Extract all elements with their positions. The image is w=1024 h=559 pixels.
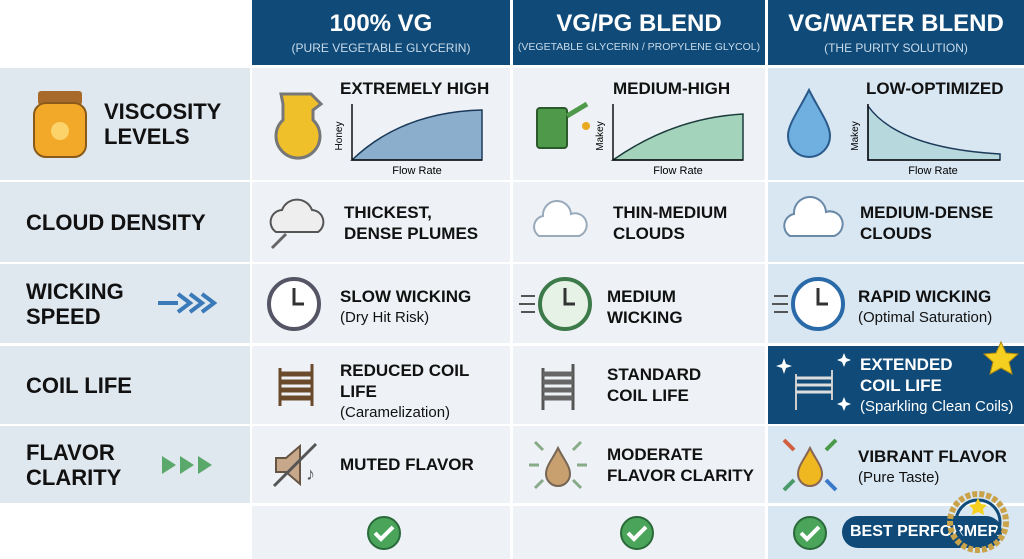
cell: VG/water cloud: CLOUDS (860, 224, 932, 243)
header: VG/water blend (768, 0, 1024, 65)
row label: viscosity (0, 68, 250, 180)
cell: VG/PG coil: COIL LIFE (607, 386, 689, 405)
header: VG/PG blend (513, 0, 765, 65)
cell: VG/water coil (highlighted): EXTENDED (860, 355, 953, 374)
cell: VG/PG flavor (513, 426, 765, 503)
cell: VG/PG viscosity: MEDIUM-HIGH (613, 79, 730, 98)
check + best performer badge: BEST PERFORMER (850, 523, 999, 540)
cell: VG flavor: MUTED FLAVOR (340, 455, 474, 474)
cell: VG coil (252, 346, 510, 424)
cell: VG/water coil (highlighted): COIL LIFE (860, 376, 942, 395)
cell: VG cloud: DENSE PLUMES (344, 224, 478, 243)
cell: VG/water flavor (768, 426, 1024, 503)
row label: coil life: COIL LIFE (26, 372, 132, 398)
cell: VG/PG viscosity (513, 68, 765, 180)
cell: VG/PG cloud: THIN-MEDIUM (613, 203, 727, 222)
cell: VG/PG flavor: MODERATE (607, 445, 703, 464)
cell: VG flavor (252, 426, 510, 503)
row label: viscosity: LEVELS (104, 124, 190, 149)
cell: VG/PG wicking: MEDIUM (607, 287, 676, 306)
header: VG/PG blend: (VEGETABLE GLYCERIN / PROPYLENE GLYCOL) (518, 41, 760, 53)
cell: VG wicking (252, 264, 510, 343)
row label: cloud density (0, 182, 250, 262)
check + best performer badge (768, 506, 1024, 559)
cell: VG wicking: (Dry Hit Risk) (340, 309, 429, 326)
cell: VG/PG coil: STANDARD (607, 365, 701, 384)
header: VG/water blend: (THE PURITY SOLUTION) (824, 41, 968, 55)
cell: VG/PG flavor: FLAVOR CLARITY (607, 466, 754, 485)
row label: coil life (0, 346, 250, 424)
cell: VG viscosity: EXTREMELY HIGH (340, 79, 489, 98)
cell: VG/water viscosity: LOW-OPTIMIZED (866, 79, 1004, 98)
bottom row: label blank (0, 506, 250, 559)
header: 100% VG: 100% VG (330, 10, 432, 37)
cell: VG/PG wicking: WICKING (607, 308, 683, 327)
cell: VG wicking: SLOW WICKING (340, 287, 471, 306)
header: 100% VG (252, 0, 510, 65)
header: VG/PG blend: VG/PG BLEND (556, 10, 722, 37)
row label: viscosity: VISCOSITY (104, 99, 221, 124)
cell: VG/water flavor: (Pure Taste) (858, 469, 939, 486)
header: VG/water blend: VG/WATER BLEND (788, 10, 1004, 37)
cell: VG/water flavor: VIBRANT FLAVOR (858, 447, 1007, 466)
row label: flavor clarity: FLAVOR (26, 440, 115, 464)
row label: wicking speed: WICKING (26, 278, 124, 304)
cell: VG/PG cloud: CLOUDS (613, 224, 685, 243)
cell: VG coil: REDUCED COIL (340, 361, 469, 380)
cell: VG/water wicking: RAPID WICKING (858, 287, 991, 306)
cell: VG/water coil (highlighted): (Sparkling Clean Coils) (860, 398, 1013, 415)
cell: VG/water coil (highlighted) (768, 346, 1024, 424)
row label: wicking speed: SPEED (26, 304, 101, 328)
cell: VG/PG coil (513, 346, 765, 424)
cell: VG/water cloud: MEDIUM-DENSE (860, 203, 993, 222)
cell: VG/water viscosity (768, 68, 1024, 180)
icon: star (982, 340, 1020, 375)
cell: VG coil: (Caramelization) (340, 404, 450, 421)
check: VG (252, 506, 510, 559)
cell: VG cloud: THICKEST, (344, 203, 432, 222)
cell: VG cloud (252, 182, 510, 262)
cell: VG/water viscosity: Makey (850, 121, 861, 151)
row label: wicking speed (0, 264, 250, 343)
cell: VG/water wicking: (Optimal Saturation) (858, 309, 992, 326)
cell: VG/water cloud (768, 182, 1024, 262)
cell: VG flavor: ♪ (306, 464, 315, 484)
row label: cloud density: CLOUD DENSITY (26, 210, 206, 234)
cell: VG viscosity (252, 68, 510, 180)
row label: flavor clarity (0, 426, 250, 503)
cell: VG/PG cloud (513, 182, 765, 262)
cell: VG/PG viscosity: Makey (595, 121, 606, 151)
check: VG/PG (513, 506, 765, 559)
cell: VG coil: LIFE (340, 382, 377, 401)
cell: VG/water wicking (768, 264, 1024, 343)
cell: VG/PG wicking (513, 264, 765, 343)
row label: flavor clarity: CLARITY (26, 464, 121, 490)
header: 100% VG: (PURE VEGETABLE GLYCERIN) (292, 41, 470, 55)
cell: VG viscosity: Honey (334, 122, 345, 150)
